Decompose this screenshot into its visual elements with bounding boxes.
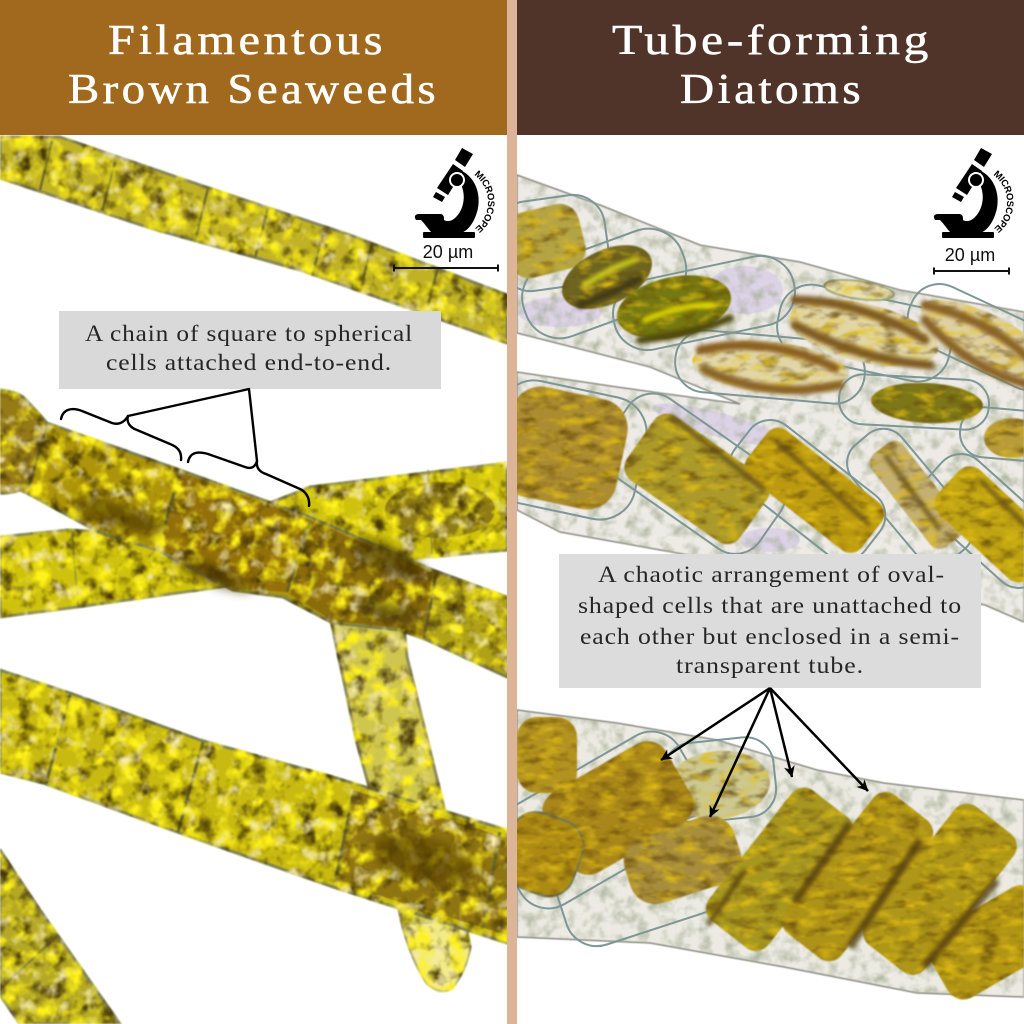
dark edges on middle tube cells bbox=[670, 415, 1024, 530]
callout: diatom cells: transparent tube. bbox=[676, 653, 864, 678]
callout: seaweed cells bbox=[59, 311, 441, 389]
dark shading on central strand bbox=[68, 489, 484, 895]
icon: microscope, right bbox=[934, 148, 998, 238]
filament: vertical strand with pale tip bbox=[330, 615, 470, 991]
title: Filamentous Brown Seaweeds bbox=[68, 18, 439, 113]
title: Filamentous Brown Seaweeds: Brown Seaweeds bbox=[68, 67, 439, 113]
callout: seaweed cells: A chain of square to spherical bbox=[85, 321, 413, 346]
arrows: from callout to diatom cells bbox=[661, 688, 868, 817]
title: Filamentous Brown Seaweeds: Filamentous bbox=[108, 18, 386, 64]
diatom cells, middle tube bbox=[495, 381, 1024, 589]
diatom cells, lower tube bbox=[494, 717, 1024, 1006]
shell outlines bbox=[481, 191, 1024, 954]
callout: diatom cells: A chaotic arrangement of oval- bbox=[598, 562, 945, 587]
annotation: brackets marking two attached cells bbox=[61, 389, 309, 506]
icon: microscope, left bbox=[414, 148, 495, 238]
diatom cells, upper tube bbox=[498, 200, 1024, 458]
filament: top diagonal strand bbox=[0, 137, 507, 343]
title: Tube-forming Diatoms: Tube-forming bbox=[612, 18, 932, 64]
label: microscope text, right: MICROSCOPE bbox=[994, 170, 1014, 233]
filament: lighter crossing strand bbox=[0, 463, 507, 617]
scale bar: 20 um, right: 20 µm bbox=[945, 245, 995, 265]
callout: diatom cells: each other but enclosed in a semi- bbox=[580, 624, 960, 649]
panel: tube-forming diatoms micrograph bbox=[481, 175, 1024, 1006]
callout: diatom cells bbox=[559, 554, 981, 688]
scale bar: 20 um, right bbox=[934, 245, 1009, 274]
title: Tube-forming Diatoms: Diatoms bbox=[680, 67, 864, 113]
filament: bottom large strand bbox=[0, 670, 507, 943]
divider between panels bbox=[507, 0, 517, 1024]
icon: microscope, left: MICROSCOPE bbox=[474, 170, 495, 233]
scale bar: 20 um, left bbox=[394, 242, 498, 272]
title: Tube-forming Diatoms bbox=[612, 18, 932, 113]
dark divisions between diatom cells bbox=[708, 823, 997, 967]
brown stripes and bright highlights in upper cells bbox=[580, 260, 1024, 390]
filament: lower-left strand bbox=[0, 850, 120, 1024]
callout: seaweed cells: cells attached end-to-end. bbox=[106, 350, 392, 375]
filament: dark central strand with four cells bbox=[0, 390, 507, 677]
header: right title bar bbox=[517, 0, 1024, 135]
callout: diatom cells: shaped cells that are unattached to bbox=[578, 593, 962, 618]
panel: filamentous brown seaweeds micrograph bbox=[0, 137, 507, 1024]
tube walls bbox=[517, 175, 1024, 997]
header: left title bar bbox=[0, 0, 507, 135]
scale bar: 20 um, left: 20 µm bbox=[423, 242, 473, 262]
